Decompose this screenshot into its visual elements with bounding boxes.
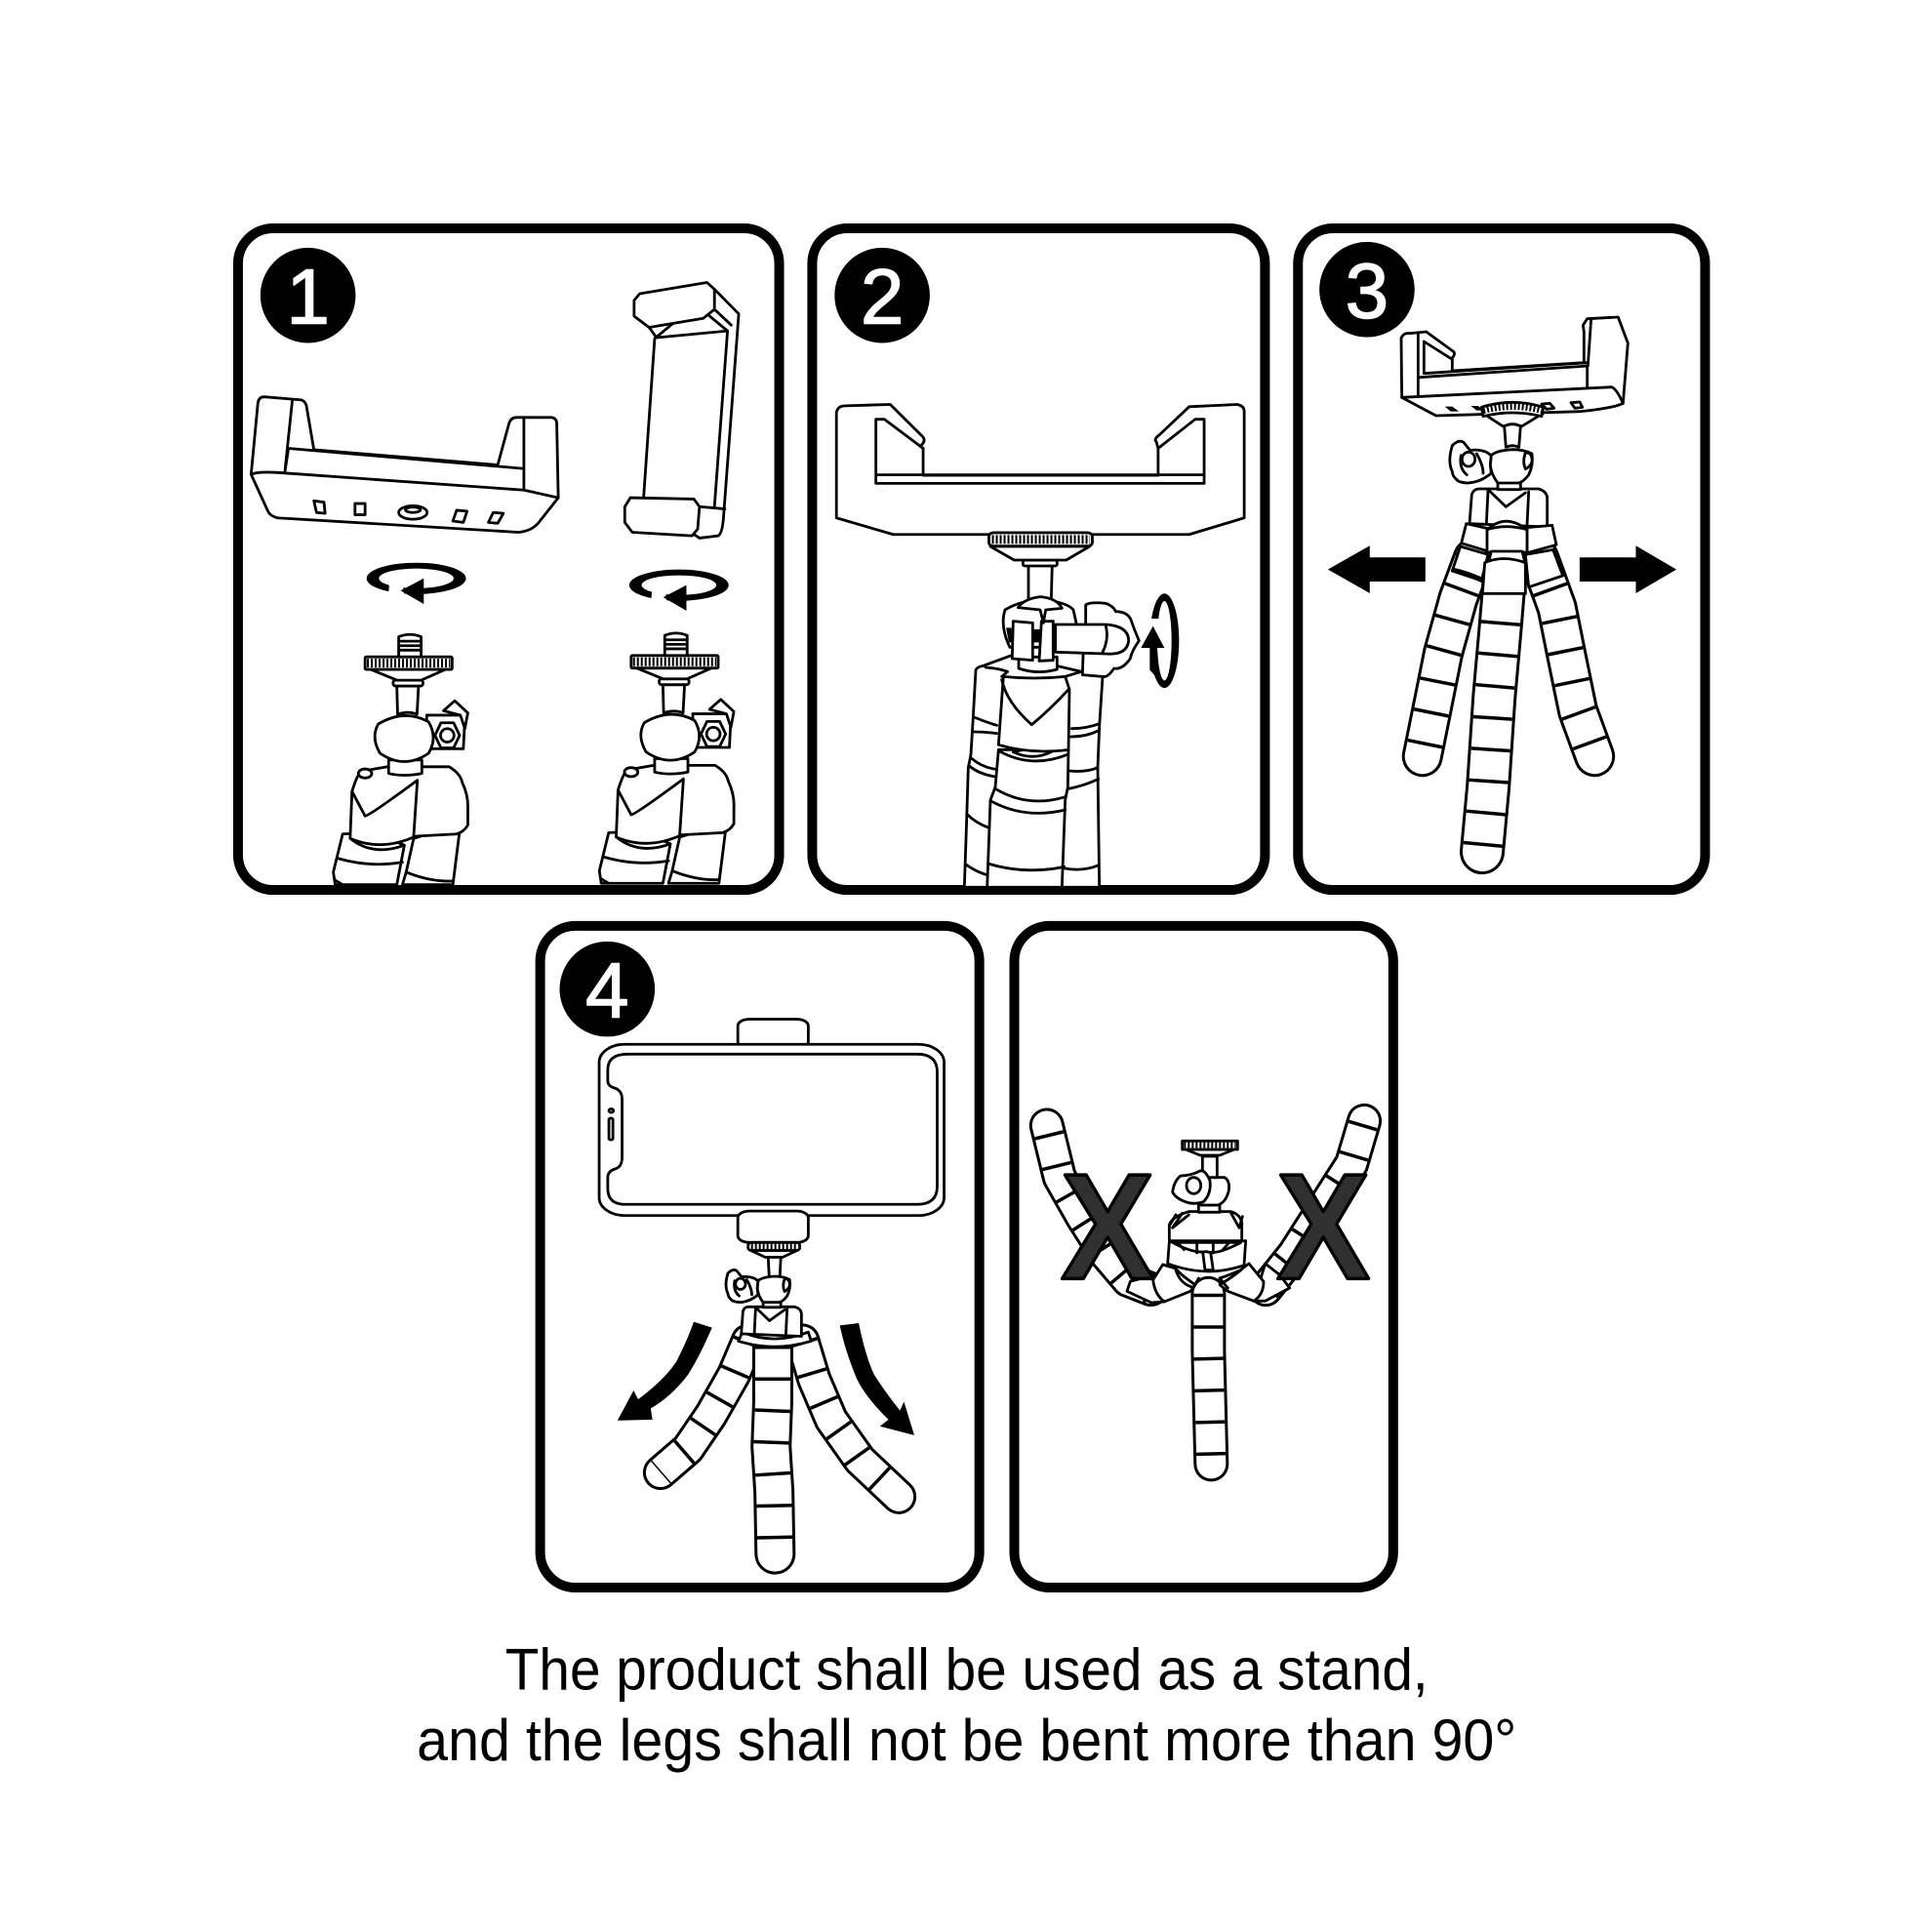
- badge: step number 1: [261, 248, 355, 342]
- badge: step number 4: 4: [585, 946, 628, 1033]
- icon: rotate arrow right: [629, 570, 729, 611]
- badge: step number 1: 1: [286, 254, 330, 341]
- badge: step number 2: 2: [861, 254, 904, 341]
- badge: step number 4: [560, 942, 655, 1036]
- icon: vertical phone holder: [624, 283, 739, 538]
- illustration: tripod body and ball head: [1450, 441, 1548, 527]
- illustration: phone in holder: [599, 1019, 945, 1257]
- icon: rotate arrow left: [367, 563, 466, 604]
- caption: and the legs shall not be bent more than 90°: [417, 1707, 1516, 1773]
- illustration: tripod body and head: [1127, 1141, 1290, 1303]
- illustration: tripod head left: [334, 634, 468, 885]
- caption: The product shall be used as a stand,: [505, 1636, 1429, 1703]
- panel: step 3: [1298, 228, 1705, 890]
- illustration: leg collar: [1452, 521, 1563, 593]
- arrow: bend right: [840, 1323, 914, 1435]
- mark: left X: X: [1061, 1142, 1154, 1310]
- icon: knob rotation arrow: [1141, 593, 1179, 688]
- illustration: tripod head right: [599, 633, 734, 883]
- illustration: tripod body and ball head: [726, 1269, 801, 1337]
- illustration: wide phone holder: [836, 405, 1244, 546]
- illustration: front leg close-up: [987, 749, 1068, 887]
- icon: horizontal phone holder: [251, 397, 558, 532]
- mark: right X: X: [1276, 1142, 1370, 1310]
- panel: step 2: [812, 228, 1265, 890]
- illustration: tripod legs curved outward: [661, 1341, 899, 1497]
- illustration: phone holder: [1401, 317, 1628, 447]
- illustration: raised legs: [1047, 1121, 1364, 1464]
- badge: step number 3: [1319, 242, 1415, 338]
- caption: [417, 1636, 1516, 1773]
- badge: step number 3: 3: [1346, 248, 1389, 335]
- illustration: ball head with lock knob: [990, 546, 1139, 677]
- arrow: pull right: [1580, 545, 1676, 593]
- panel: step 4: [541, 926, 980, 1588]
- panel: step 1: [238, 228, 780, 890]
- illustration: leg collar: [739, 1332, 811, 1347]
- illustration: tripod legs spread: [1423, 558, 1594, 756]
- arrow: pull left: [1328, 545, 1426, 593]
- panel: incorrect use, legs bent too far: [1015, 926, 1393, 1588]
- illustration: rear legs close-up: [964, 656, 1103, 887]
- arrow: bend left: [618, 1322, 712, 1421]
- illustration: tripod body: [986, 657, 1081, 751]
- badge: step number 2: [834, 248, 930, 342]
- illustration: stem: [768, 1257, 781, 1280]
